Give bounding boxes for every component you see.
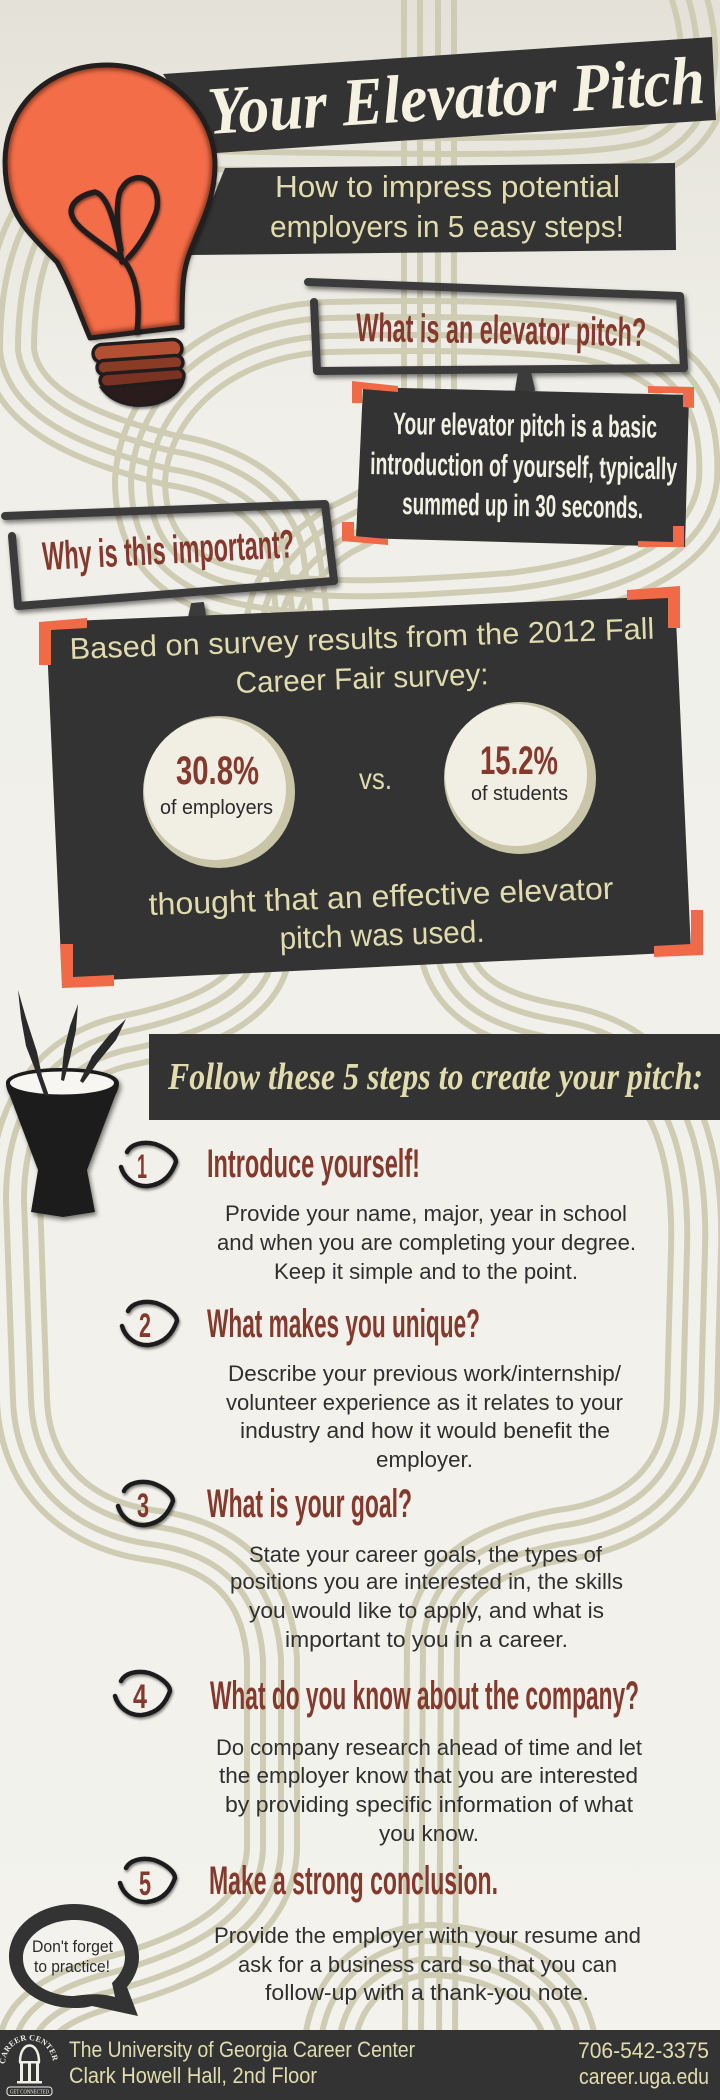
step 2: volunteer experience as it relates to your	[226, 1390, 623, 1415]
number badge 1	[121, 1143, 176, 1186]
step 1: Keep it simple and to the point.	[274, 1259, 578, 1284]
step 1: and when you are completing your degree.	[217, 1230, 636, 1255]
step 1: Introduce yourself!	[207, 1142, 420, 1186]
versus label: vs.	[359, 763, 392, 796]
step 5: Make a strong conclusion.	[209, 1859, 498, 1903]
step 3: What is your goal?	[207, 1482, 412, 1526]
callout: speech bubble: Don't forget	[32, 1937, 113, 1956]
sign: why is this important: Why is this important?	[41, 522, 295, 579]
step 4: you know.	[379, 1821, 479, 1846]
subtitle	[270, 169, 624, 244]
stat: students: of students	[471, 783, 568, 805]
survey intro text	[69, 613, 655, 700]
footer address: The University of Georgia Career Center	[69, 2037, 415, 2062]
footer contact: 706-542-3375	[578, 2038, 709, 2063]
step 3: important to you in a career.	[285, 1627, 568, 1652]
step 2: industry and how it would benefit the	[240, 1418, 610, 1443]
step 4: the employer know that you are interested	[219, 1763, 638, 1788]
stat: employers: of employers	[160, 797, 273, 819]
number badge 5	[120, 1859, 175, 1903]
footer address: Clark Howell Hall, 2nd Floor	[69, 2063, 317, 2088]
step 5: Provide the employer with your resume and	[214, 1923, 641, 1948]
stat: employers	[143, 716, 295, 868]
steps heading band	[149, 1034, 720, 1120]
logo: career center arch: GET CONNECTED	[10, 2088, 49, 2096]
survey conclusion text: thought that an effective elevator	[148, 871, 614, 922]
subtitle banner	[190, 163, 676, 255]
footer	[0, 2030, 720, 2100]
panel corners	[39, 586, 703, 988]
step 2: Describe your previous work/internship/	[228, 1361, 622, 1386]
panel: definition	[342, 381, 694, 547]
step 1: Provide your name, major, year in school	[225, 1201, 627, 1226]
footer address	[69, 2037, 415, 2088]
step 3: positions you are interested in, the skills	[230, 1569, 623, 1594]
step 2: employer.	[376, 1447, 473, 1472]
step 2	[122, 1302, 623, 1472]
step 1	[121, 1142, 636, 1284]
survey intro text: Career Fair survey:	[235, 658, 489, 700]
number badge 4: 4	[133, 1678, 147, 1716]
stat: employers: 30.8%	[176, 749, 259, 793]
survey intro text: Based on survey results from the 2012 Fall	[69, 613, 655, 666]
step 4: Do company research ahead of time and let	[216, 1735, 642, 1760]
stat: students	[444, 702, 596, 854]
number badge 3: 3	[137, 1487, 149, 1525]
subtitle: employers in 5 easy steps!	[270, 209, 624, 244]
step 3: State your career goals, the types of	[249, 1542, 603, 1567]
subtitle: How to impress potential	[275, 169, 620, 204]
step 5	[120, 1859, 641, 2005]
survey conclusion text	[148, 871, 614, 956]
number badge 4	[115, 1672, 170, 1716]
number badge 3	[118, 1482, 173, 1525]
stat: students: 15.2%	[480, 739, 558, 783]
bulb screw base	[92, 339, 184, 405]
sign: what is an elevator pitch	[308, 282, 684, 390]
step 5: follow-up with a thank-you note.	[265, 1980, 589, 2005]
sign: why is this important	[5, 504, 334, 622]
number badge 1: 1	[137, 1148, 147, 1186]
step 3: you would like to apply, and what is	[249, 1598, 604, 1623]
callout: speech bubble	[9, 1904, 139, 2016]
number badge 2	[122, 1302, 177, 1345]
step 4	[115, 1672, 642, 1846]
footer contact	[578, 2038, 709, 2089]
title banner	[163, 37, 716, 153]
step 2: What makes you unique?	[207, 1302, 480, 1346]
logo: career center arch	[0, 2035, 58, 2096]
panel: survey results	[39, 586, 703, 988]
step 4: by providing specific information of what	[225, 1792, 633, 1817]
step 3	[118, 1482, 623, 1652]
callout: speech bubble: to practice!	[34, 1957, 110, 1976]
panel corners	[342, 381, 694, 547]
number badge 2: 2	[139, 1307, 151, 1345]
survey conclusion text: pitch was used.	[279, 914, 485, 956]
step 5: ask for a business card so that you can	[238, 1952, 617, 1977]
number badge 5: 5	[139, 1865, 151, 1903]
icon: cup of brushes	[6, 990, 126, 1217]
icon: light bulb	[5, 65, 215, 405]
